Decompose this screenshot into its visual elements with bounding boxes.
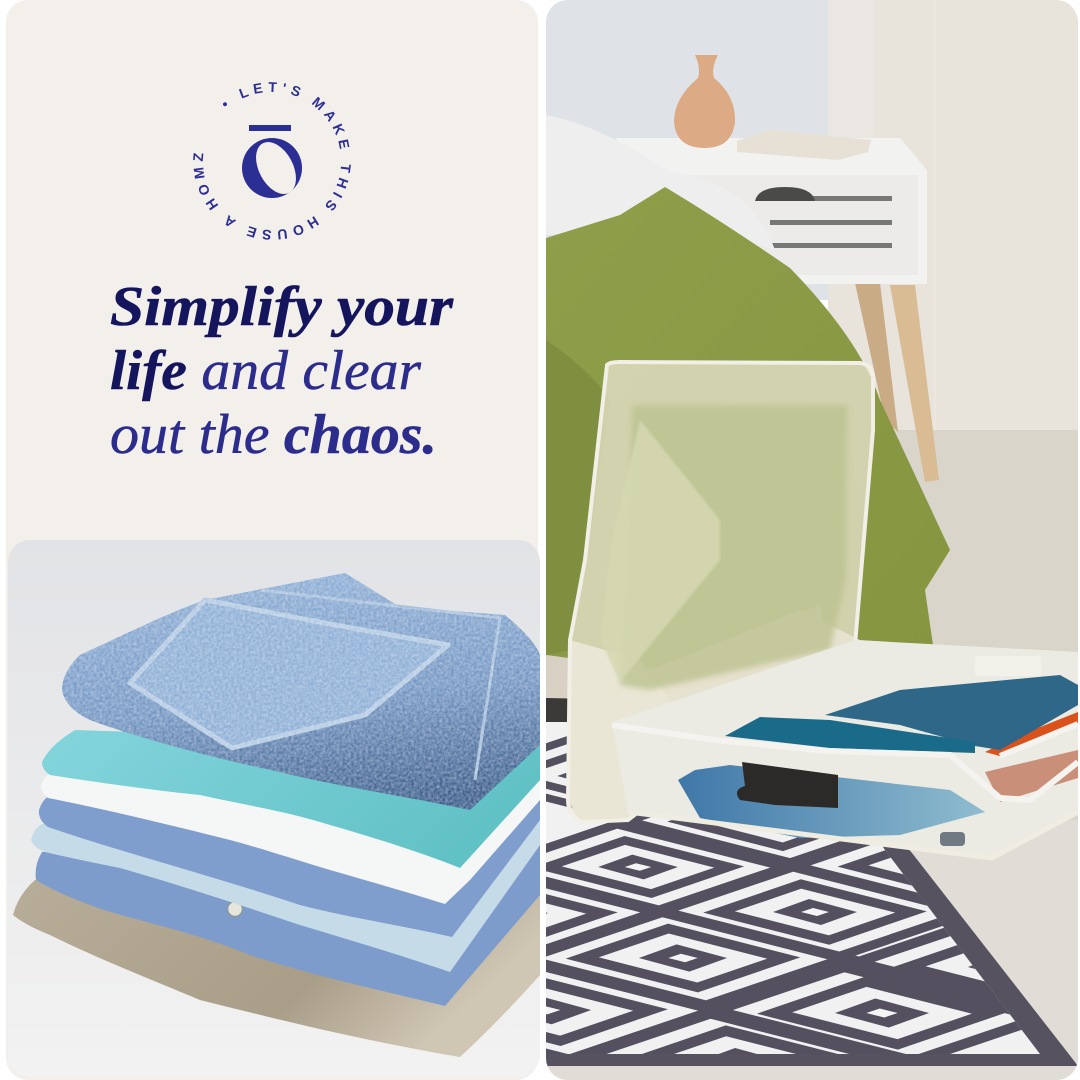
fold of blanket visible through lid (600, 420, 720, 682)
dark gap under bed (546, 698, 568, 722)
drawer slots (770, 196, 892, 248)
green blanket (546, 187, 950, 670)
wall (546, 0, 828, 300)
box lid (568, 362, 873, 822)
denim jeans (62, 573, 540, 810)
photo: bedroom with storage box (546, 0, 1078, 1080)
vase (674, 55, 735, 148)
orange clothes (985, 712, 1078, 756)
box tray (612, 640, 1078, 858)
rug (546, 722, 1077, 1066)
tray rim (612, 725, 1078, 800)
blue shirt bottom (36, 845, 540, 1006)
title heading: out the chaos. (110, 404, 437, 466)
circular slogan text: • LET'S MAKE THIS HOUSE A HOMZ (193, 82, 351, 240)
blanket fold (546, 340, 602, 655)
wheel (940, 832, 965, 846)
denim in box (825, 675, 1078, 750)
lid opaque underlay over floor and rug (570, 640, 630, 818)
title heading: Simplify your (110, 276, 454, 338)
drawer handle (755, 187, 815, 201)
lid green tint (620, 405, 847, 690)
jeans waistband seam (260, 590, 500, 780)
nightstand legs (855, 283, 939, 482)
floor (546, 430, 1080, 1080)
door frame and panel (828, 0, 1078, 432)
khaki trousers (13, 880, 540, 1057)
bed base under blanket (546, 655, 568, 698)
title heading (110, 276, 454, 466)
teal t-shirt (42, 730, 540, 868)
pale blue shirt (31, 820, 540, 972)
nightstand (615, 138, 927, 284)
pillow (546, 115, 775, 250)
denim texture (60, 570, 540, 815)
logo mark: o with macron (242, 125, 304, 201)
logo badge (193, 82, 351, 240)
clothes seen through the front (678, 765, 985, 838)
title heading: life and clear (110, 340, 421, 402)
black latch (737, 762, 838, 808)
photo: folded clothes stack (8, 540, 540, 1077)
jeans pocket (130, 600, 448, 748)
panel: left beige background (6, 0, 538, 1080)
button (228, 902, 242, 916)
rear clip (975, 656, 1041, 676)
tray opaque base (612, 640, 1078, 858)
book (737, 130, 871, 160)
blue shirt middle (38, 797, 540, 937)
teal shirt in box (725, 717, 975, 753)
white t-shirt (41, 774, 540, 904)
